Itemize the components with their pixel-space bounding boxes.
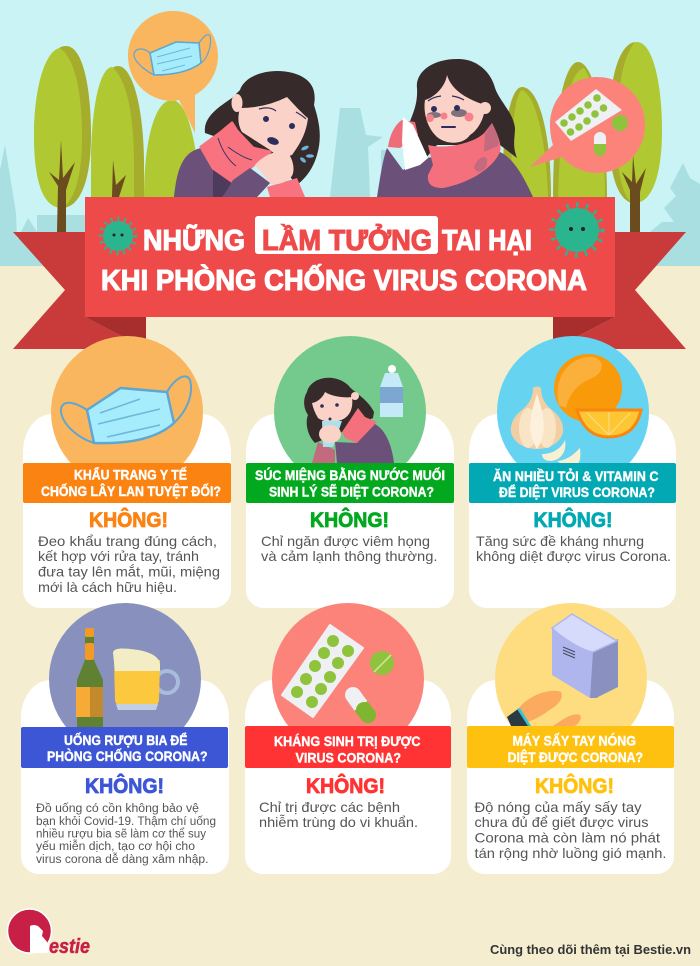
title line 2: KHI PHÒNG CHỐNG VIRUS CORONA <box>101 263 587 297</box>
answer: KHÔNG! <box>534 508 612 532</box>
trees: left group <box>34 46 199 232</box>
trees: right group <box>502 42 662 232</box>
question line 2: SINH LÝ SẼ DIỆT CORONA? <box>269 482 434 500</box>
icon: shirt cuff <box>507 708 531 726</box>
icon: wine bottle <box>76 628 103 728</box>
virus icon left <box>100 218 136 254</box>
illustration circle <box>51 336 203 488</box>
icon: small mask <box>134 35 211 75</box>
question banner <box>469 463 676 503</box>
tissue <box>402 117 428 170</box>
question banner <box>21 727 228 768</box>
tree 5 <box>553 62 607 200</box>
speech bubble: mask <box>128 11 218 133</box>
tree 6 <box>609 42 662 232</box>
question: UỐNG RƯỢU BIA ĐỂ <box>64 731 188 748</box>
coat inner shadow <box>213 168 233 197</box>
answer: KHÔNG! <box>89 508 168 532</box>
title line 1: NHỮNG <box>143 223 245 257</box>
question: ĂN NHIỀU TỎI & VITAMIN C <box>493 467 658 484</box>
face <box>238 97 308 156</box>
question line 2: PHÒNG CHỐNG CORONA? <box>47 747 208 764</box>
illustration circle <box>49 603 201 755</box>
explanation: chưa đủ để giết được virus <box>474 814 648 830</box>
icon: capsule <box>594 132 606 156</box>
explanation: bạn khỏi Covid-19. Thậm chí uống <box>36 816 216 828</box>
icon: garlic <box>511 386 563 449</box>
icon: pill pack <box>282 625 363 717</box>
hair <box>408 59 517 165</box>
eyebrows <box>428 96 464 101</box>
eyes and mouth <box>263 116 295 146</box>
answer: KHÔNG! <box>85 774 164 798</box>
explanation: kết hợp với rửa tay, tránh <box>38 548 199 564</box>
explanation: yếu miễn dịch, tạo cơ hội cho <box>36 840 195 853</box>
logo bird <box>30 925 52 953</box>
icon: garlic cloves <box>542 440 580 463</box>
explanation <box>474 799 666 861</box>
scarf <box>201 123 270 182</box>
question line 2: DIỆT ĐƯỢC CORONA? <box>508 748 643 765</box>
pills in the pack <box>291 635 354 708</box>
card 3: garlic and vitamin C <box>469 336 676 608</box>
explanation: Tăng sức đề kháng nhưng <box>476 533 644 549</box>
question line 2: VIRUS CORONA? <box>296 750 401 766</box>
icon: round pill <box>370 651 394 675</box>
icon: hands <box>519 691 581 728</box>
explanation: đưa tay lên mắt, mũi, miệng <box>38 564 220 580</box>
glove hand <box>388 120 418 148</box>
ribbon tail left <box>13 232 146 349</box>
question banner <box>23 463 231 503</box>
pills in the pack <box>560 94 607 136</box>
eye bags <box>427 109 467 118</box>
tree 1 <box>34 46 91 232</box>
illustration circle <box>272 603 424 755</box>
explanation: Corona mà còn làm nó phát <box>474 830 660 846</box>
explanation <box>261 533 438 564</box>
explanation: tán rộng nhờ luồng gió mạnh. <box>474 845 666 861</box>
card 2: salt water <box>246 336 454 608</box>
woman coughing <box>174 71 320 197</box>
question line 2: CHỐNG LÂY LAN TUYỆT ĐỐI? <box>41 482 221 499</box>
explanation: virus corona dễ dàng xâm nhập. <box>36 853 208 866</box>
tree 4 <box>502 87 551 197</box>
ribbon fold right <box>553 317 615 349</box>
sleeve <box>223 168 270 197</box>
title highlighted words: LẦM TƯỞNG <box>262 223 432 257</box>
icon: orange slice <box>577 410 641 437</box>
card 6: hand dryer <box>467 603 674 874</box>
illustration circle <box>497 336 649 488</box>
cough drops <box>299 145 314 164</box>
question banner <box>245 726 451 768</box>
ribbon fold left <box>85 317 146 349</box>
explanation <box>36 803 216 866</box>
icon: water bottle <box>380 365 403 417</box>
eyes and mouth <box>431 105 460 128</box>
question banner <box>467 726 674 768</box>
ribbon tail right <box>553 232 686 349</box>
illustration: woman gargling <box>304 378 394 463</box>
background: sand <box>0 266 700 966</box>
eyebrows <box>259 108 306 119</box>
icon: surgical mask <box>61 376 191 443</box>
card 4: alcohol <box>21 603 229 874</box>
answer: KHÔNG! <box>535 774 614 798</box>
question: KHẨU TRANG Y TẾ <box>74 466 187 482</box>
explanation: Đeo khẩu trang đúng cách, <box>38 533 217 549</box>
explanation <box>259 799 418 830</box>
icon: beer mug <box>113 648 178 710</box>
scarf lower end <box>267 178 305 197</box>
coat <box>174 148 270 197</box>
explanation <box>38 533 220 595</box>
woman with tissue <box>377 59 533 197</box>
question banner <box>246 463 454 503</box>
icon: round pill <box>612 115 628 131</box>
logo circle <box>8 909 52 953</box>
tree 3 <box>144 100 199 197</box>
scarf folds <box>218 138 252 166</box>
background: sky <box>0 0 700 266</box>
cheeks <box>426 112 474 122</box>
tree 2 <box>91 66 144 200</box>
question: SÚC MIỆNG BẰNG NƯỚC MUỐI <box>255 466 445 483</box>
answer: KHÔNG! <box>310 508 389 532</box>
question: MÁY SẤY TAY NÓNG <box>512 732 636 748</box>
title highlight box <box>255 216 438 254</box>
face <box>424 75 485 143</box>
title end of line 1: TAI HẠI <box>442 225 532 257</box>
logo wordmark: estie <box>49 936 90 958</box>
question: KHÁNG SINH TRỊ ĐƯỢC <box>274 733 420 749</box>
icon: orange <box>554 354 622 422</box>
title banner <box>85 197 615 317</box>
explanation <box>476 533 671 564</box>
hand <box>255 151 294 184</box>
explanation: Chỉ trị được các bệnh <box>259 799 400 815</box>
city skyline <box>0 108 700 266</box>
explanation: nhiễm trùng do vi khuẩn. <box>259 814 418 830</box>
icon: capsule <box>353 695 368 715</box>
scarf <box>428 123 501 188</box>
logo: Bestie <box>8 909 90 958</box>
footer credit: Cùng theo dõi thêm tại Bestie.vn <box>490 942 691 957</box>
card 1: mask <box>23 336 231 608</box>
ear <box>479 102 491 114</box>
illustration circle <box>274 336 426 488</box>
card 5: antibiotics <box>245 603 451 874</box>
explanation: Chỉ ngăn được viêm họng <box>261 533 430 549</box>
hair <box>205 71 320 185</box>
virus icon right <box>551 204 603 256</box>
speech bubble: pills <box>530 77 645 173</box>
explanation: Đồ uống có cồn không bảo vệ <box>36 803 199 815</box>
answer: KHÔNG! <box>306 774 385 798</box>
explanation: mới là cách hữu hiệu. <box>38 579 177 595</box>
explanation: Độ nóng của mấy sấy tay <box>474 799 642 815</box>
illustration circle <box>495 603 647 755</box>
scarf stains <box>474 123 499 172</box>
icon: hand dryer <box>552 614 618 698</box>
explanation: và cảm lạnh thông thường. <box>261 548 438 564</box>
icon: pill pack <box>555 89 622 141</box>
explanation: không diệt được virus Corona. <box>476 548 671 564</box>
ear <box>232 94 242 112</box>
coat <box>377 148 533 197</box>
question line 2: ĐỂ DIỆT VIRUS CORONA? <box>499 483 655 500</box>
explanation: nhiều rượu bia sẽ làm cơ thể suy <box>36 828 206 840</box>
